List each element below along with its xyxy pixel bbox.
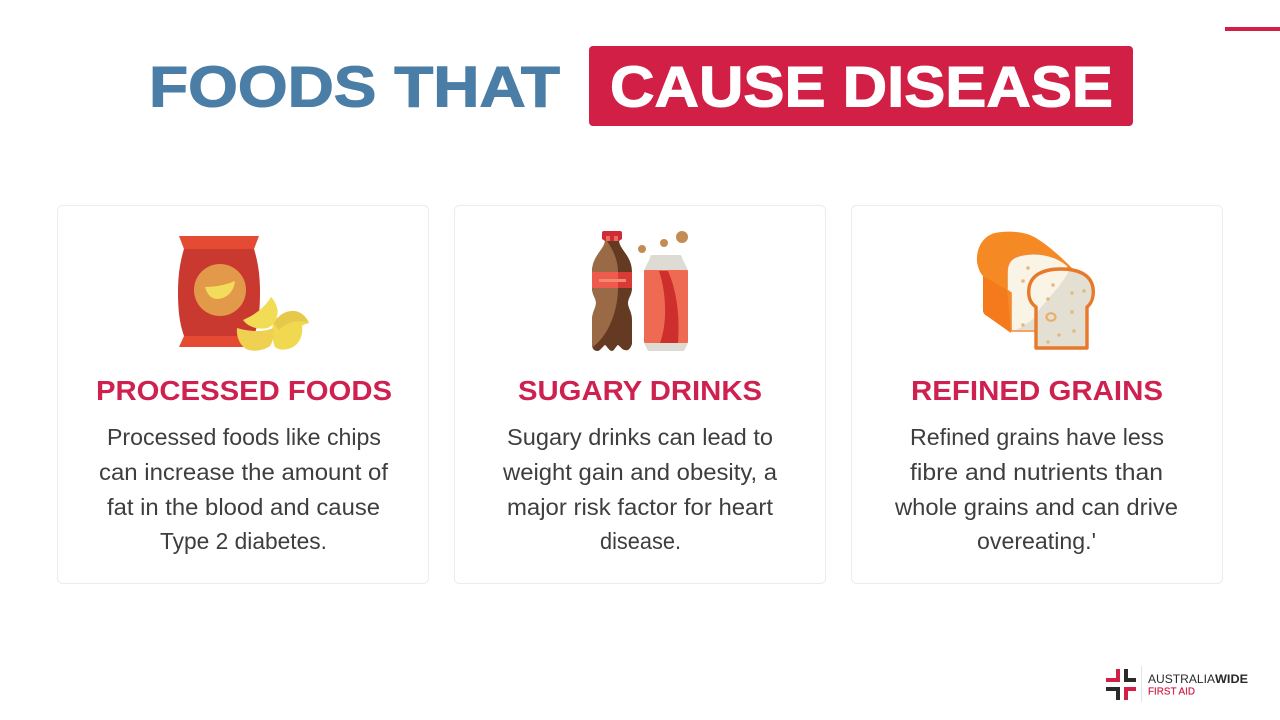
text: refined grains description bbox=[894, 424, 1178, 554]
panel: refined grains bbox=[852, 206, 1222, 584]
text: processed foods description bbox=[99, 424, 389, 554]
title: foods that: FOODS THAT bbox=[149, 56, 560, 120]
text: refined grains description: fibre and nutrients than bbox=[910, 459, 1163, 485]
text: refined grains description: overeating.' bbox=[977, 528, 1096, 554]
text: processed foods description: Processed foods like chips bbox=[107, 424, 381, 450]
heading: processed foods: PROCESSED FOODS bbox=[96, 375, 392, 406]
text: refined grains description: Refined grains have less bbox=[910, 424, 1164, 450]
panel: processed foods bbox=[58, 206, 428, 584]
panel: sugary drinks bbox=[454, 206, 826, 584]
logo text: Australia Wide: AUSTRALIA bbox=[1148, 674, 1215, 686]
logo text: Australia Wide: WIDE bbox=[1215, 674, 1248, 686]
heading: sugary drinks: SUGARY DRINKS bbox=[518, 375, 762, 406]
heading: refined grains: REFINED GRAINS bbox=[911, 375, 1163, 406]
accent bar bbox=[1225, 27, 1280, 31]
icon: soda bottle and can bbox=[592, 231, 688, 351]
title: cause disease highlight: CAUSE DISEASE bbox=[610, 56, 1113, 120]
title bbox=[149, 46, 1133, 126]
logo text: First Aid: FIRST AID bbox=[1148, 686, 1195, 698]
text: sugary drinks description bbox=[502, 424, 777, 554]
text: sugary drinks description: Sugary drinks can lead to bbox=[507, 424, 773, 450]
title: cause disease highlight bbox=[589, 46, 1133, 126]
text: processed foods description: Type 2 diabetes. bbox=[160, 528, 327, 554]
text: processed foods description: fat in the blood and cause bbox=[107, 494, 380, 520]
text: sugary drinks description: weight gain and obesity, a bbox=[502, 459, 777, 485]
text: sugary drinks description: disease. bbox=[600, 528, 681, 554]
logo: Australia Wide First Aid bbox=[1106, 666, 1248, 702]
icon: logo cross bbox=[1106, 669, 1136, 700]
icon: bag of chips bbox=[178, 236, 309, 351]
icon: loaf of bread bbox=[977, 232, 1093, 348]
text: processed foods description: can increase the amount of bbox=[99, 459, 389, 485]
text: refined grains description: whole grains and can drive bbox=[894, 494, 1178, 520]
logo text: Australia Wide bbox=[1148, 674, 1248, 686]
text: sugary drinks description: major risk factor for heart bbox=[507, 494, 774, 520]
